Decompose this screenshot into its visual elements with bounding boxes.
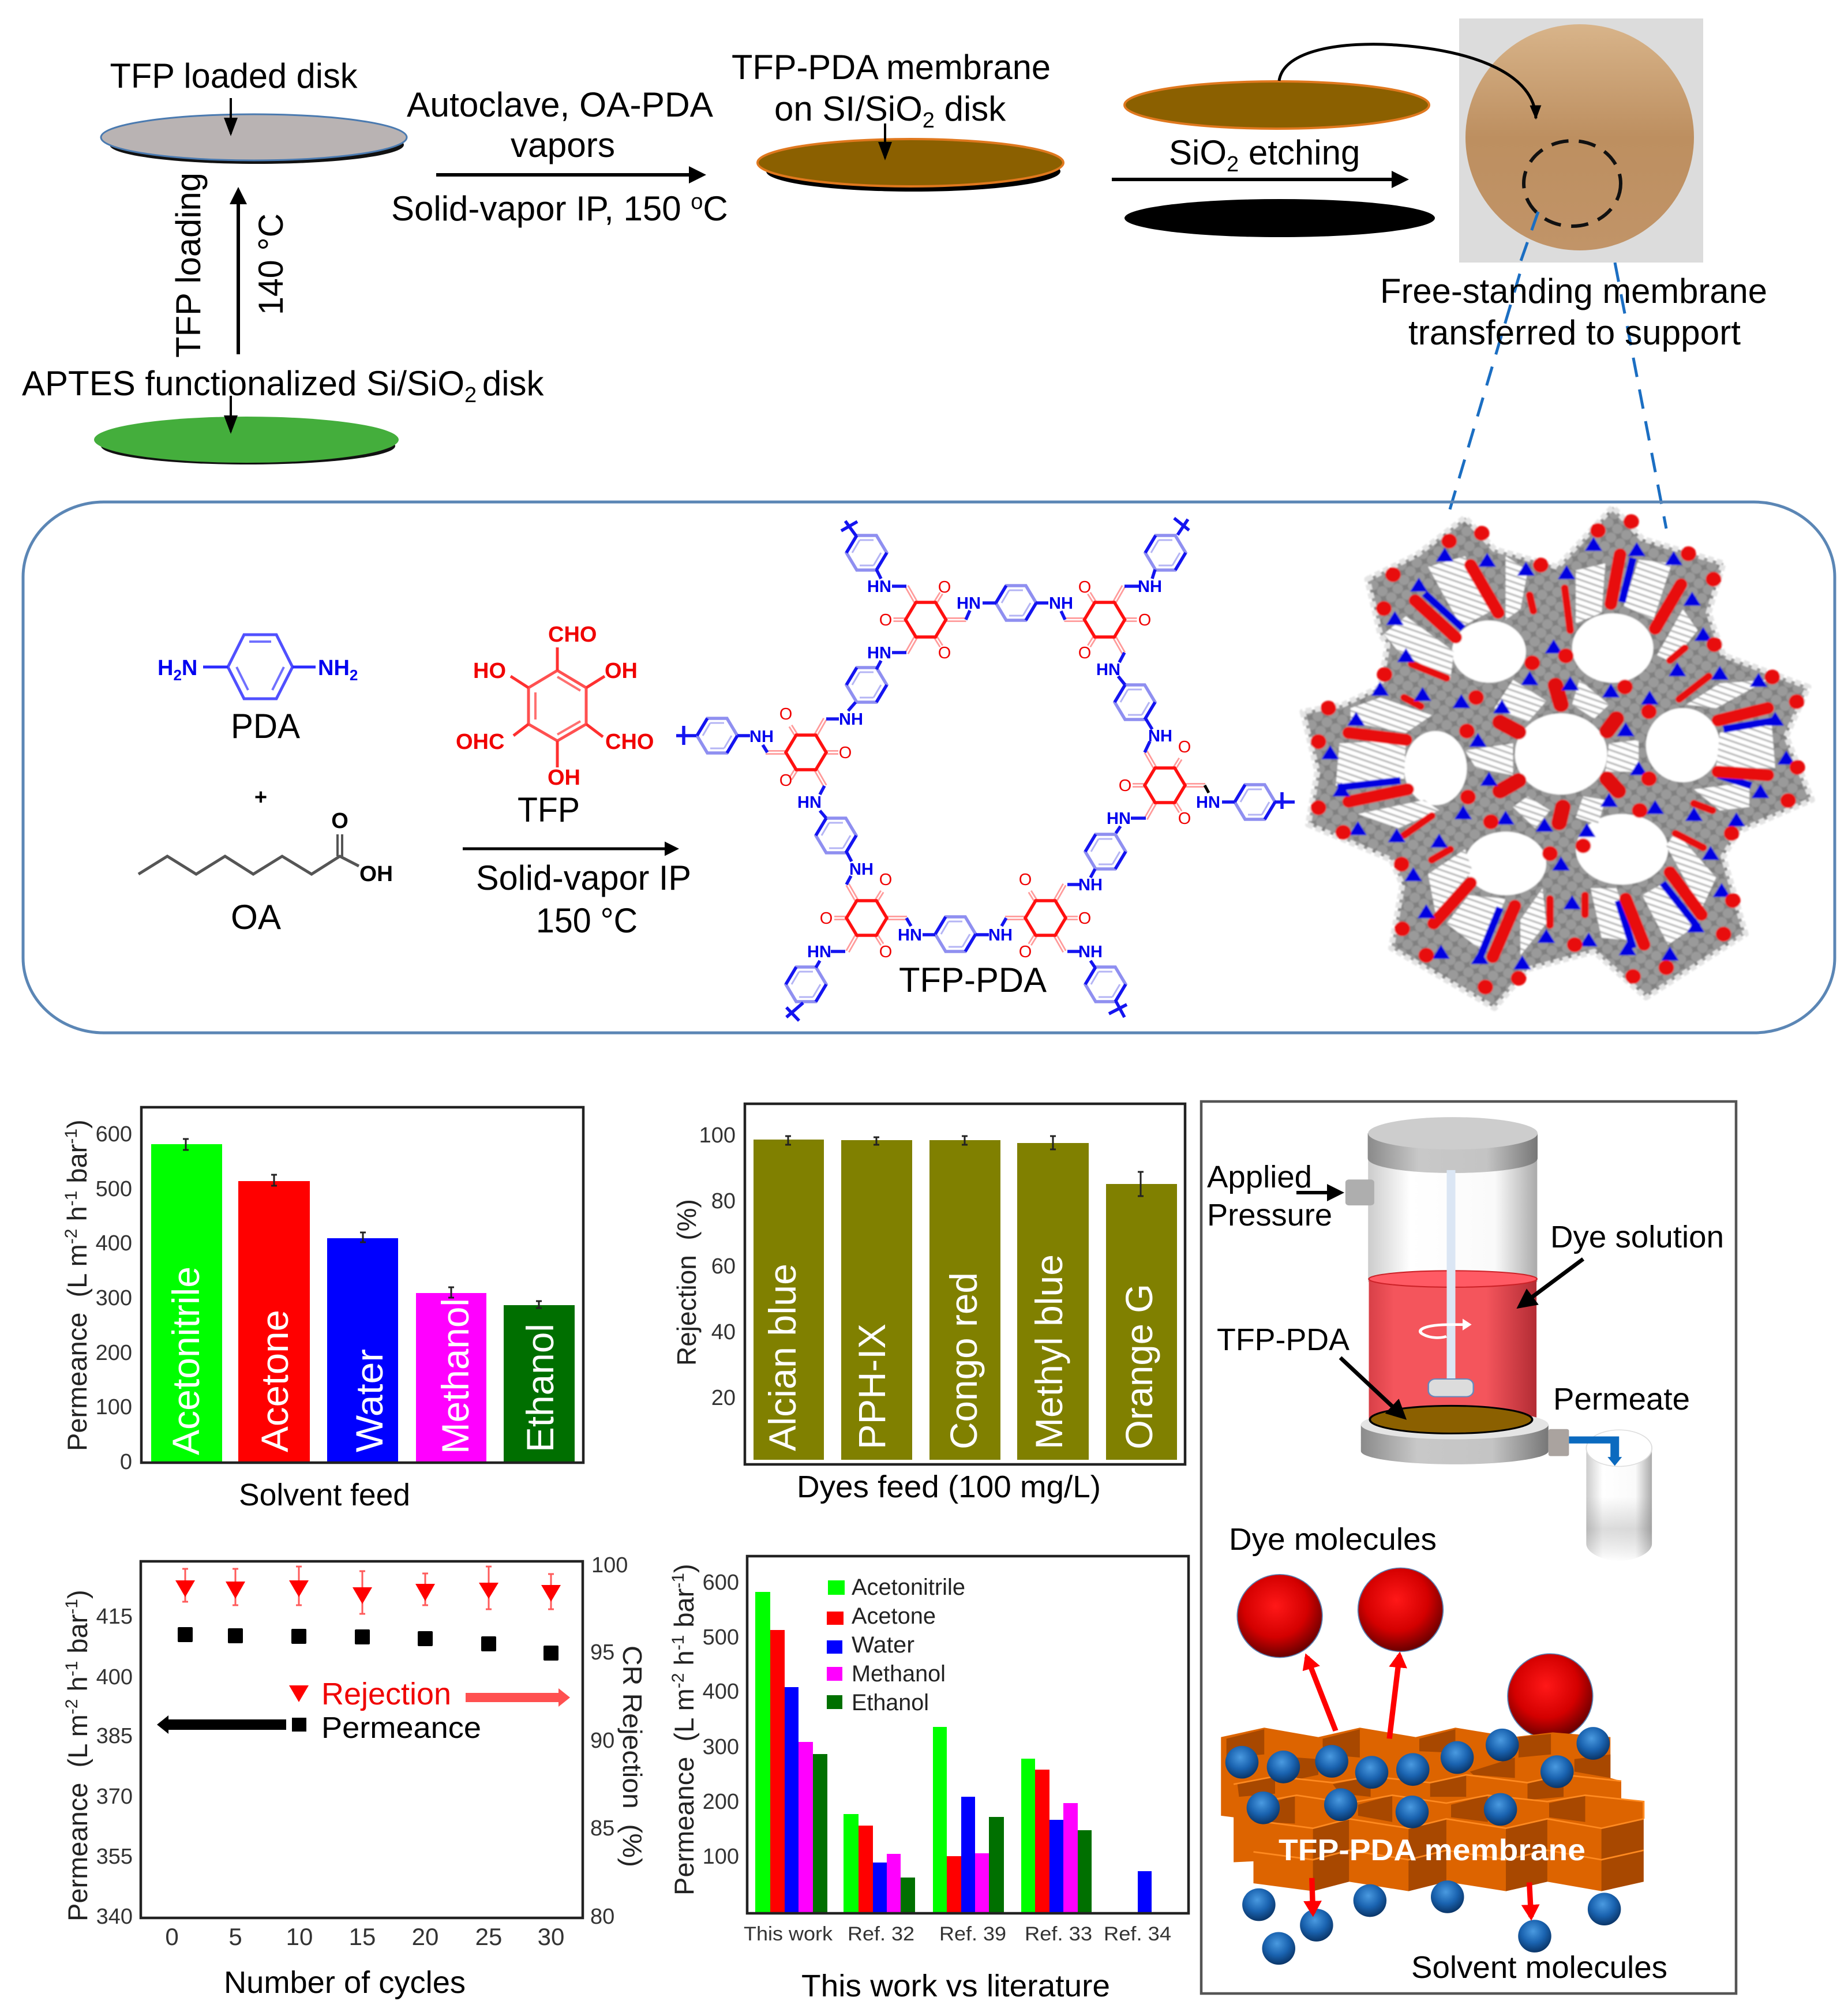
left axis title: h — [62, 1676, 93, 1699]
amine bonds — [676, 518, 1295, 1021]
arrow: etching step — [1112, 178, 1405, 181]
black bond — [1205, 785, 1209, 793]
y tick labels: 20 — [711, 1386, 736, 1410]
amine labels: HN — [1196, 793, 1220, 812]
label: Dye molecules: Dye molecules — [1229, 1522, 1437, 1557]
disk: membrane on silicon — [758, 139, 1063, 192]
y tick labels — [96, 1122, 132, 1474]
photo: free-standing membrane — [1459, 18, 1703, 263]
error bars — [183, 1139, 542, 1308]
label: TFP loading: TFP loading — [169, 173, 208, 358]
label: SiO2 etching: etching — [1239, 133, 1360, 172]
chart: this work vs literature — [669, 1556, 1189, 2003]
molecule: PDA — [158, 635, 358, 699]
chart: dye rejection bars — [672, 1104, 1185, 1504]
dead-end filtration cell — [1345, 1117, 1652, 1561]
label: APTES functionalized disk: disk — [473, 364, 545, 403]
panel: fabrication process flow — [22, 18, 1767, 464]
base plate — [1361, 1410, 1549, 1464]
carbonyl oxygen labels: O — [879, 611, 892, 629]
right tick labels: 95 — [590, 1640, 614, 1665]
right tick labels: 85 — [590, 1816, 614, 1841]
y tick labels: 500 — [703, 1625, 739, 1650]
group: ref 34 — [1138, 1871, 1152, 1912]
y tick labels: 100 — [96, 1395, 132, 1419]
label: TFP-PDA membrane on disk: TFP-PDA membrane — [732, 48, 1051, 87]
right tick labels: 80 — [590, 1905, 614, 1929]
box outline — [23, 502, 1835, 1033]
left axis title: ) — [62, 1590, 93, 1599]
permeate port — [1549, 1429, 1569, 1456]
molecule: PDA: N — [182, 656, 197, 680]
group: ref 33 — [1021, 1759, 1092, 1912]
molecule: TFP — [456, 623, 654, 790]
y tick labels: 100 — [703, 1845, 739, 1869]
label: Solid-vapor IP 150 C: Solid-vapor IP, 150 — [391, 189, 681, 228]
left axis title: Permeance (L m — [62, 1714, 93, 1921]
carbonyl oxygen labels: O — [1178, 738, 1191, 756]
bar labels: PPH-IX — [850, 1324, 893, 1449]
label: Permeate: Permeate — [1553, 1382, 1690, 1417]
label: free-standing membrane: transferred to support — [1408, 313, 1741, 352]
y tick labels: 0 — [120, 1450, 132, 1474]
amine labels: NH — [1138, 578, 1162, 596]
x tick labels: 0 — [165, 1923, 179, 1950]
carbonyl oxygen labels: O — [938, 644, 951, 662]
molecule: PDA: H — [158, 656, 173, 680]
carbonyl oxygen labels: O — [1119, 777, 1131, 795]
molecule: TFP: CHO — [605, 730, 654, 754]
right axis title: CR Rejection (%) — [617, 1646, 647, 1867]
group: this work — [755, 1592, 827, 1912]
keto rings — [766, 586, 1205, 951]
right tick labels — [590, 1553, 628, 1929]
stirrer — [1420, 1170, 1474, 1397]
right tick labels: 90 — [590, 1729, 614, 1753]
x tick labels: 30 — [538, 1923, 564, 1950]
error bars — [785, 1136, 1144, 1196]
x tick labels — [165, 1923, 564, 1950]
panel frame — [1201, 1101, 1736, 1993]
y tick labels: 600 — [703, 1571, 739, 1595]
y axis title: h — [669, 1650, 699, 1673]
x tick labels: 25 — [475, 1923, 502, 1950]
axes frame — [141, 1561, 583, 1918]
bar labels: Alcian blue — [761, 1264, 804, 1451]
label: Applied Pressure — [1207, 1160, 1332, 1232]
carbonyl oxygen labels: O — [839, 744, 852, 762]
y axis title: -1 — [62, 1191, 81, 1206]
y axis title: h — [62, 1206, 92, 1229]
bars — [151, 1144, 575, 1463]
y axis title: ) — [669, 1564, 699, 1573]
label: Solid-vapor IP 150 C: o — [691, 190, 703, 214]
arrow: applied pressure — [1296, 1191, 1341, 1194]
amine labels: HN — [1107, 810, 1131, 828]
label: TFP-PDA membrane on disk: on SI/SiO — [774, 89, 923, 128]
amine labels: NH — [1148, 727, 1172, 745]
orange hexagonal membrane block — [1221, 1728, 1644, 1891]
x tick labels — [744, 1923, 1171, 1945]
permeance markers — [178, 1627, 558, 1661]
molecule: PDA: 2 — [173, 666, 182, 684]
legend: rejection: Rejection — [321, 1677, 451, 1711]
left axis title: -2 — [62, 1699, 81, 1714]
y tick labels: 400 — [96, 1231, 132, 1256]
molecule: PDA: NH — [318, 656, 350, 680]
amine labels: NH — [988, 926, 1013, 945]
left tick labels: 385 — [96, 1724, 133, 1748]
bar labels — [761, 1254, 1160, 1451]
bar labels: Congo red — [942, 1272, 985, 1449]
x tick labels: Ref. 34 — [1104, 1923, 1171, 1945]
label: free-standing membrane: Free-standing membrane — [1380, 272, 1767, 310]
arrow: TFP loading step — [237, 190, 240, 354]
molecule: TFP: HO — [473, 659, 506, 683]
label: Applied Pressure: Applied — [1207, 1160, 1312, 1194]
molecule: TFP: CHO — [548, 623, 597, 647]
x axis title: Number of cycles — [224, 1965, 466, 2000]
dashed zoom lines from photo to molecular model — [1446, 212, 1666, 529]
y axis title: Permeance (L m — [62, 1244, 92, 1451]
amine labels: NH — [1078, 943, 1103, 961]
bar labels: Ethanol — [519, 1324, 561, 1452]
y axis title: Permeance (L m — [669, 1688, 699, 1895]
x tick labels: 15 — [349, 1923, 376, 1950]
x axis title: Solvent feed — [239, 1478, 410, 1512]
left tick labels: 355 — [96, 1845, 133, 1869]
label: Solvent molecules: Solvent molecules — [1411, 1950, 1667, 1985]
arrow: to green disk — [230, 396, 232, 432]
amine labels: NH — [839, 710, 863, 729]
bar labels: Acetone — [253, 1310, 296, 1452]
label: 140 degrees: 140 °C — [252, 213, 290, 315]
y tick labels — [699, 1123, 736, 1410]
carbonyl oxygen labels — [779, 578, 1191, 961]
left axis title: bar — [62, 1614, 93, 1661]
bar labels: Orange G — [1118, 1284, 1160, 1449]
left tick labels: 415 — [96, 1605, 133, 1629]
plus sign: + — [254, 785, 267, 810]
bar labels: Acetonitrile — [164, 1266, 207, 1455]
group: ref 39 — [933, 1727, 1004, 1912]
bar labels: Water — [348, 1349, 391, 1452]
legend: Ethanol — [852, 1690, 929, 1715]
left tick labels — [96, 1605, 133, 1929]
disk: silicon wafer black — [1124, 199, 1435, 237]
x tick labels: This work — [744, 1923, 833, 1945]
bar labels: Methyl blue — [1028, 1254, 1070, 1449]
amine labels: NH — [849, 860, 874, 879]
x tick labels: Ref. 39 — [939, 1923, 1006, 1945]
disk: lifted membrane — [1124, 81, 1429, 129]
amine labels: NH — [1049, 594, 1073, 613]
permeate pipe — [1569, 1440, 1622, 1466]
y tick labels: 60 — [711, 1254, 736, 1279]
amine labels: HN — [957, 594, 981, 613]
amine labels: HN — [867, 578, 891, 596]
y axis title: bar — [669, 1588, 699, 1635]
label: TFP-PDA membrane: TFP-PDA membrane — [1279, 1834, 1585, 1867]
glass cylinder — [1368, 1159, 1537, 1282]
amine labels: HN — [898, 926, 922, 945]
arrow: TFP-PDA to membrane — [1340, 1358, 1404, 1417]
y tick labels: 400 — [703, 1680, 739, 1704]
carbonyl oxygen labels: O — [820, 909, 833, 928]
left tick labels: 340 — [96, 1905, 133, 1929]
label: reaction conditions: Solid-vapor IP — [476, 859, 691, 897]
disk: APTES green — [94, 417, 399, 464]
legend: Methanol — [852, 1661, 946, 1687]
carbonyl oxygen labels: O — [1078, 909, 1091, 928]
y tick labels: 300 — [96, 1286, 132, 1310]
label: SiO2 etching: 2 — [1227, 152, 1239, 177]
label: Solid-vapor IP 150 C: C — [703, 189, 728, 228]
amine labels: HN — [867, 644, 891, 662]
legend: Acetonitrile — [852, 1575, 965, 1600]
label: TFP: TFP — [518, 790, 580, 829]
label: OA: OA — [231, 898, 281, 936]
bars — [754, 1140, 1177, 1460]
label: Autoclave OA-PDA vapors: vapors — [511, 126, 615, 164]
label: TFP-PDA in cell: TFP-PDA — [1217, 1322, 1350, 1357]
left axis title: -1 — [62, 1599, 81, 1614]
label: TFP-PDA membrane on disk — [732, 48, 1051, 133]
rejection error bars — [182, 1567, 554, 1614]
x tick labels: 20 — [412, 1923, 438, 1950]
y axis title: -2 — [669, 1673, 688, 1688]
legend: permeance — [157, 1711, 481, 1745]
carbonyl oxygen labels: O — [1078, 578, 1091, 597]
label: Applied Pressure: Pressure — [1207, 1198, 1332, 1232]
chart: solvent permeance bars — [62, 1107, 583, 1512]
label: SiO2 etching: SiO — [1169, 133, 1227, 172]
chart: cycling stability — [62, 1553, 647, 2000]
disk: TFP loaded — [101, 114, 407, 164]
arrow: reaction — [463, 847, 676, 850]
carbonyl oxygen labels: O — [1078, 644, 1091, 662]
amine labels: NH — [1078, 876, 1103, 894]
carbonyl oxygen labels: O — [1178, 810, 1191, 828]
pressure port — [1345, 1179, 1374, 1205]
label: Dye solution: Dye solution — [1550, 1220, 1724, 1254]
y axis title: -1 — [669, 1573, 688, 1588]
label: free-standing membrane — [1380, 272, 1767, 352]
y axis title: -1 — [62, 1129, 81, 1144]
y tick labels: 600 — [96, 1122, 132, 1146]
y axis title: ) — [62, 1119, 92, 1129]
arrow: dye solution — [1520, 1259, 1583, 1306]
x tick labels: 5 — [228, 1923, 242, 1950]
molecule: PDA: 2 — [350, 666, 358, 684]
label: PDA: PDA — [231, 707, 300, 745]
y tick labels: 40 — [711, 1320, 736, 1344]
label: TFP-PDA membrane on disk: 2 — [923, 108, 935, 133]
molecule: octanoic acid: O — [331, 809, 348, 833]
amine labels: HN — [797, 793, 822, 812]
bar labels — [164, 1266, 561, 1455]
panel: chemistry rounded box — [23, 502, 1835, 1033]
carbonyl oxygen labels: O — [779, 705, 792, 724]
label: APTES functionalized disk: APTES functionalized Si/SiO — [22, 364, 464, 403]
red dye liquid — [1369, 1271, 1537, 1419]
molecule: octanoic acid — [138, 809, 393, 886]
arrow: curved from membrane to photo — [1279, 44, 1536, 118]
left tick labels: 400 — [96, 1665, 133, 1689]
legend: Acetone — [852, 1603, 936, 1629]
label: TFP loaded disk: TFP loaded disk — [110, 57, 358, 95]
legend: Water — [852, 1632, 914, 1658]
y tick labels: 80 — [711, 1189, 736, 1213]
legend: rejection — [289, 1677, 570, 1711]
x tick labels: 10 — [286, 1923, 313, 1950]
rejection markers — [175, 1580, 561, 1604]
membrane in cell — [1370, 1406, 1532, 1433]
carbonyl oxygen labels: O — [938, 578, 951, 597]
x axis title: Dyes feed (100 mg/L) — [797, 1470, 1101, 1504]
label: Autoclave OA-PDA vapors — [407, 85, 713, 164]
carbonyl oxygen labels: O — [1019, 943, 1032, 961]
carbonyl oxygen labels: O — [1019, 871, 1032, 889]
axes frame — [745, 1104, 1185, 1464]
carbonyl oxygen labels: O — [1138, 611, 1151, 629]
x tick labels: Ref. 33 — [1025, 1923, 1092, 1945]
label: reaction conditions: 150 °C — [536, 901, 638, 940]
arrow: autoclave step — [436, 173, 703, 177]
axes frame — [141, 1107, 583, 1463]
y tick labels: 100 — [699, 1123, 736, 1148]
legend — [827, 1575, 965, 1715]
amine labels: NH — [749, 728, 774, 746]
label: TFP-PDA membrane on disk: disk — [935, 89, 1006, 128]
y tick labels: 200 — [703, 1790, 739, 1814]
y axis title: Rejection (%) — [672, 1199, 702, 1366]
carbonyl oxygen labels: O — [779, 771, 792, 790]
red rejection and permeation arrows — [1307, 1655, 1531, 1917]
left axis title: -1 — [62, 1661, 81, 1676]
lid — [1368, 1117, 1538, 1173]
x axis title: This work vs literature — [801, 1969, 1110, 2003]
molecule: TFP: OH — [605, 659, 638, 683]
amine labels: HN — [807, 943, 831, 961]
dye spheres — [1237, 1568, 1593, 1738]
arrow: to membrane disk — [884, 123, 886, 158]
dashed lines over photo — [1520, 212, 1538, 263]
bar labels: Methanol — [434, 1298, 477, 1454]
legend: permeance: Permeance — [321, 1711, 481, 1745]
y tick labels: 500 — [96, 1177, 132, 1201]
amine labels — [749, 578, 1220, 961]
label: reaction conditions — [476, 859, 691, 940]
arrow: to TFP loaded disk — [230, 98, 232, 134]
molecule: TFP: OHC — [456, 730, 504, 754]
solvent spheres — [1225, 1727, 1621, 1965]
permeate collector — [1586, 1430, 1652, 1561]
right tick labels: 100 — [591, 1553, 628, 1577]
left tick labels: 370 — [96, 1785, 133, 1809]
y axis title: -1 — [669, 1635, 688, 1650]
molecule: TFP-PDA hexagonal framework — [676, 518, 1295, 1021]
panel: filtration setup and separation mechanism — [1201, 1101, 1736, 1993]
label: TFP-PDA: TFP-PDA — [899, 961, 1047, 999]
y tick labels: 200 — [96, 1341, 132, 1365]
group: ref 32 — [844, 1814, 915, 1912]
phenylene linkers — [697, 535, 1275, 1002]
label: Autoclave OA-PDA vapors: Autoclave, OA-PDA — [407, 85, 713, 124]
molecule: TFP: OH — [548, 766, 580, 790]
carbonyl oxygen labels: O — [879, 943, 892, 961]
y tick labels: 300 — [703, 1735, 739, 1759]
molecular space-filling model — [1303, 507, 1812, 1008]
axes frame — [747, 1556, 1189, 1913]
y tick labels — [703, 1571, 739, 1869]
y axis title: bar — [62, 1144, 92, 1191]
label: APTES functionalized disk: 2 — [464, 383, 477, 407]
y axis title: -2 — [62, 1229, 81, 1244]
membrane separation schematic — [1221, 1568, 1644, 1965]
amine labels: HN — [1096, 661, 1120, 679]
molecule: octanoic acid: OH — [359, 862, 393, 886]
carbonyl oxygen labels: O — [879, 871, 892, 889]
x tick labels: Ref. 32 — [848, 1923, 914, 1945]
